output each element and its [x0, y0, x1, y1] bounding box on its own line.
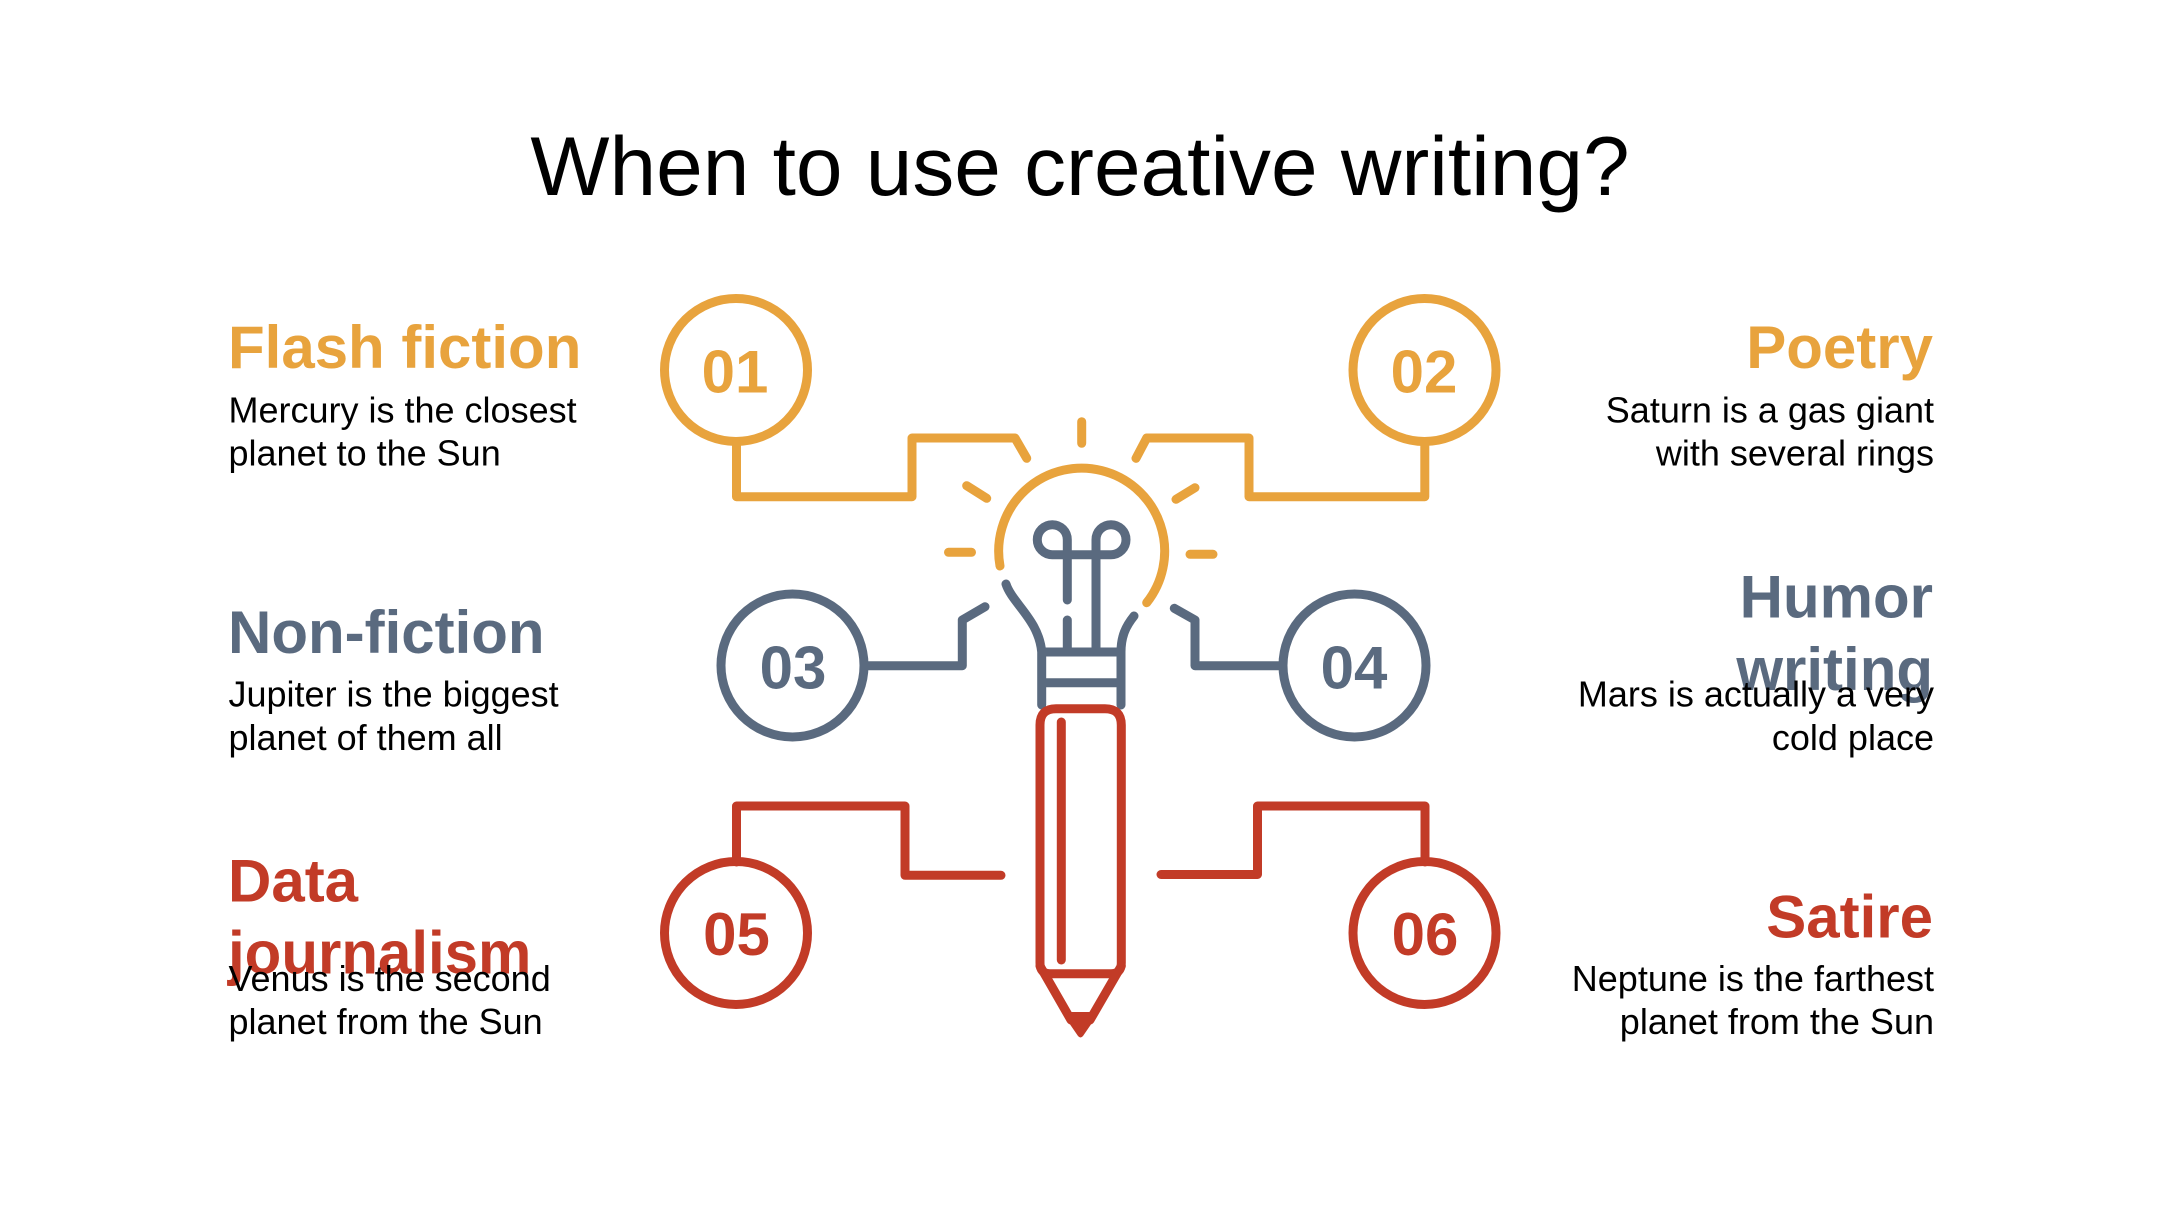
item 05: Data journalism heading: journalism	[227, 920, 531, 986]
number badge 01: 01	[702, 338, 768, 406]
filament	[1037, 525, 1126, 650]
number badge 06	[1353, 862, 1496, 1004]
item 04: description: Mars is actually a very	[1578, 674, 1934, 715]
connector 01	[736, 438, 1027, 497]
item 06: description: planet from the Sun	[1620, 1001, 1934, 1042]
pencil point	[1040, 966, 1121, 1020]
item 05: Data journalism heading: Data	[228, 848, 359, 914]
connector 06	[1161, 806, 1425, 874]
item 03: Non-fiction heading: Non-fiction	[228, 599, 545, 666]
connector 04	[1174, 608, 1282, 666]
item 02: description: with several rings	[1655, 432, 1934, 474]
item 06: Satire heading: Satire	[1766, 884, 1933, 950]
number badge 01	[664, 298, 808, 442]
item 05: description: planet from the Sun	[228, 1001, 543, 1042]
item 02: description: Saturn is a gas giant	[1606, 390, 1934, 430]
item 04: Humor writing heading: writing	[1735, 636, 1933, 703]
number badge 03: 03	[760, 634, 826, 702]
pencil body	[1040, 709, 1121, 974]
number badge 02	[1353, 298, 1496, 442]
light rays	[948, 422, 1213, 554]
number badge 04	[1283, 594, 1426, 737]
item 06: description: Neptune is the farthest	[1572, 958, 1934, 999]
number badge 05	[664, 862, 808, 1004]
bulb glass arc	[999, 468, 1165, 603]
item 05: description: Venus is the second	[228, 958, 551, 999]
connector 05	[736, 806, 1001, 875]
number badge 06: 06	[1392, 901, 1458, 968]
pencil highlight	[1057, 722, 1066, 960]
number badge 05: 05	[703, 901, 770, 968]
bulb neck	[1006, 584, 1134, 705]
item 04: description: cold place	[1772, 717, 1934, 758]
item 01: description: Mercury is the closest	[228, 390, 577, 430]
icon: light bulb	[948, 422, 1213, 705]
item 03: description: planet of them all	[228, 717, 503, 758]
item 01: Flash fiction heading: Flash fiction	[228, 314, 581, 381]
number badge 02: 02	[1391, 338, 1457, 406]
number badge 03	[721, 594, 864, 737]
pencil tip	[1067, 1012, 1094, 1038]
connector 02	[1136, 438, 1425, 497]
connector 03	[866, 607, 985, 666]
item 04: Humor writing heading: Humor	[1740, 563, 1933, 630]
item 03: description: Jupiter is the biggest	[228, 674, 559, 715]
item 02: Poetry heading: Poetry	[1746, 314, 1934, 381]
icon: pencil	[1040, 709, 1121, 1038]
title: When to use creative writing?	[530, 119, 1630, 213]
number badge 04: 04	[1321, 634, 1388, 702]
item 01: description: planet to the Sun	[228, 432, 501, 474]
